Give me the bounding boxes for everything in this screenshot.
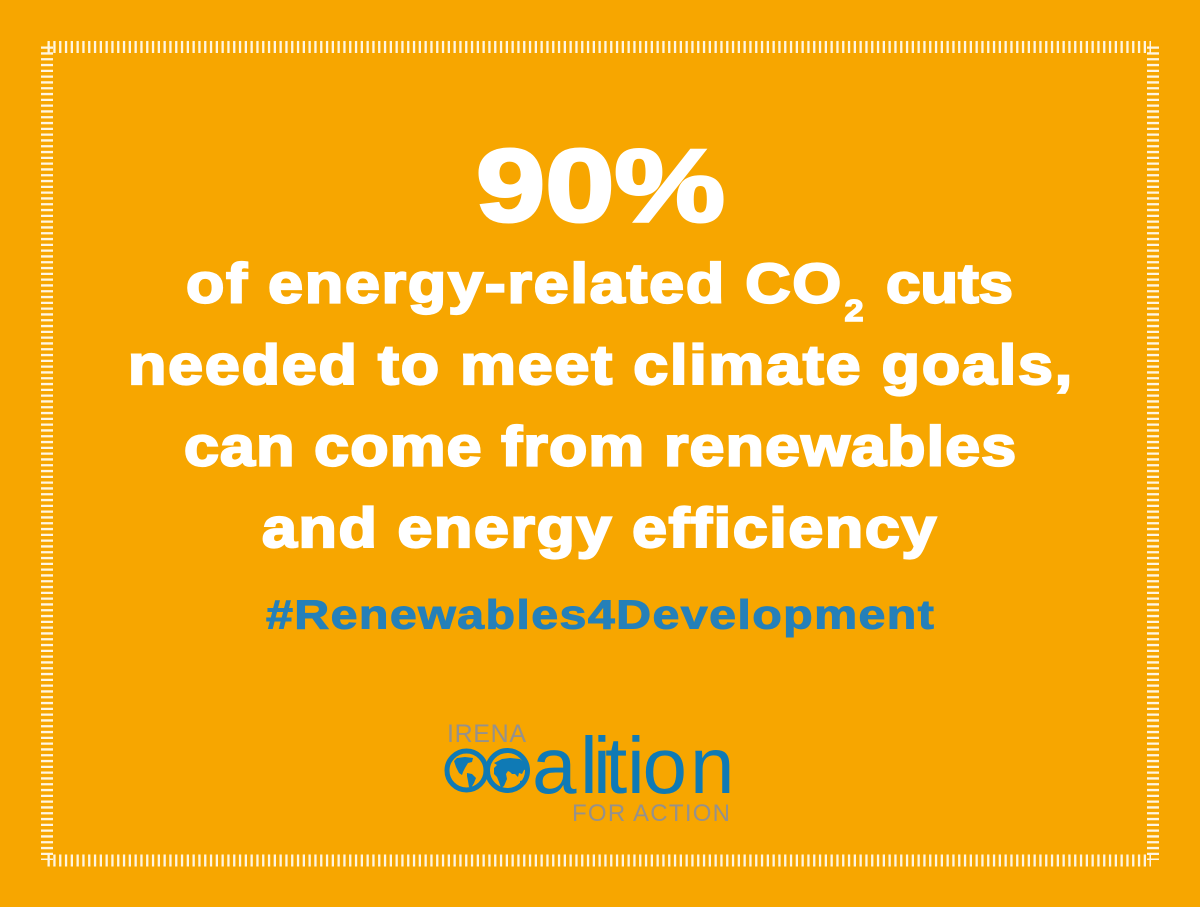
logo: for action label: FOR ACTION: [572, 800, 730, 827]
line 1: of energy-related CO: [186, 252, 841, 315]
line 1: cuts: [886, 252, 1013, 314]
main statement: [128, 252, 1072, 559]
logo: IRENA label: IRENA: [447, 720, 526, 748]
hashtag: #Renewables4Development: [266, 591, 934, 638]
line 1: [186, 252, 1013, 328]
logo: globe letter o with Eurasia and Africa: [488, 750, 528, 790]
line 3: can come from renewables: [184, 415, 1016, 478]
logo: IRENA Coalition for Action: [447, 720, 734, 827]
logo: globe letter c with the Americas: [447, 751, 486, 790]
line 4: and energy efficiency: [262, 496, 936, 559]
line 1: 2: [844, 293, 864, 328]
headline statistic: 90%: [476, 128, 725, 243]
logo: alition wordmark: alition: [532, 721, 734, 810]
line 2: needed to meet climate goals,: [128, 333, 1072, 396]
